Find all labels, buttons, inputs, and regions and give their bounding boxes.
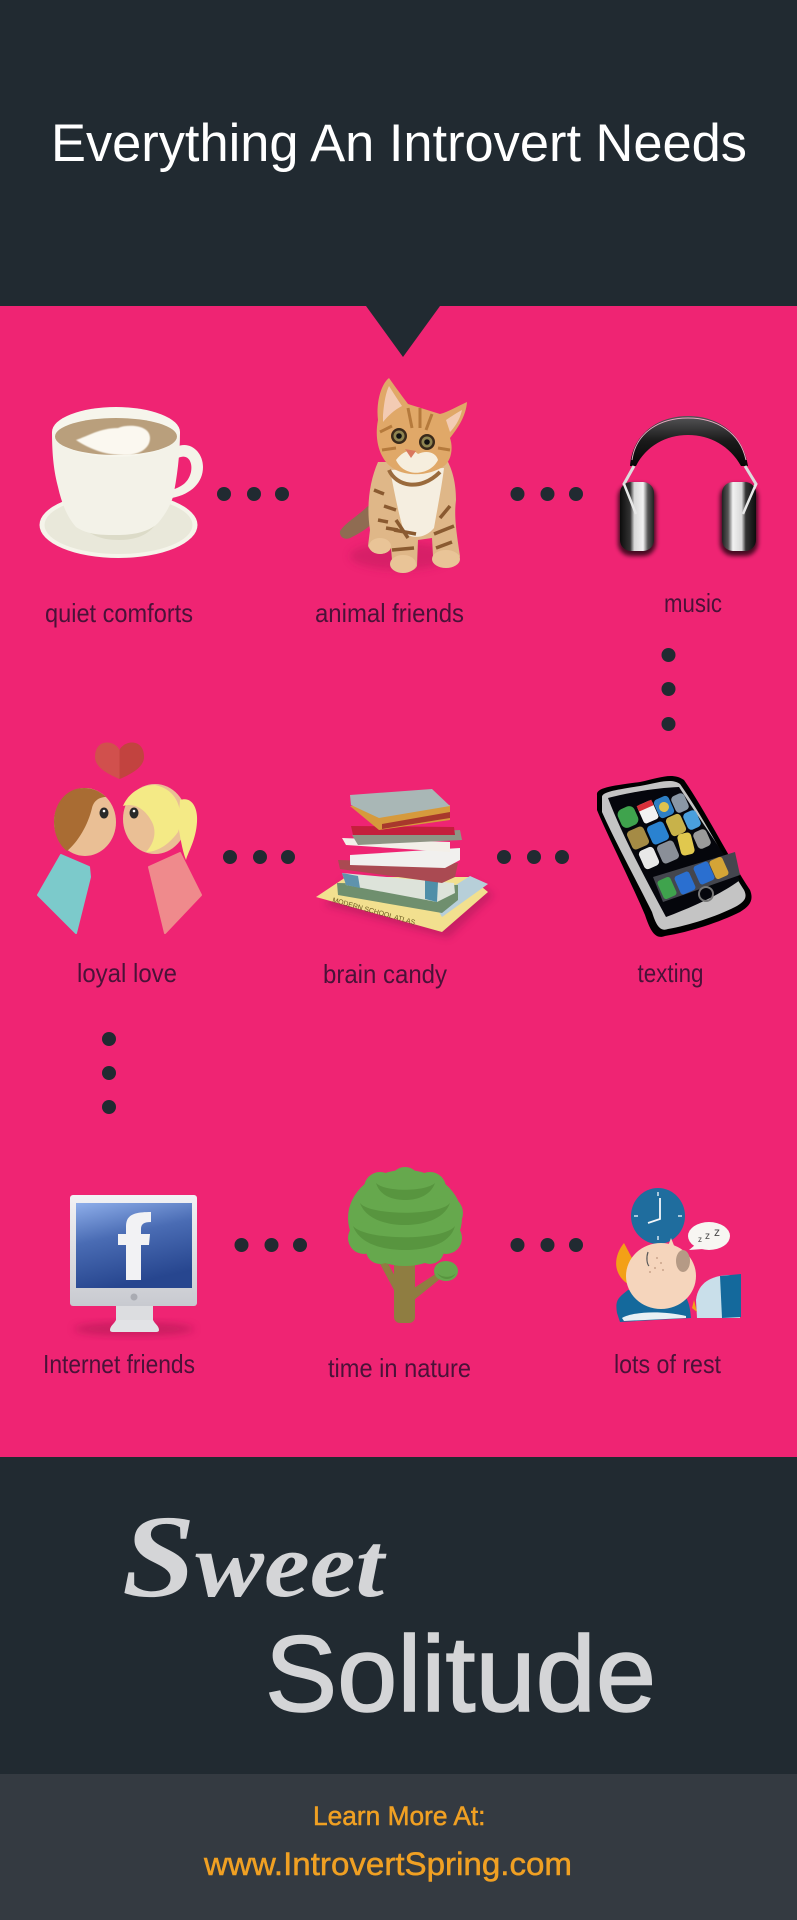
panel: header (0, 0, 797, 306)
label: quiet comforts: quiet comforts (45, 598, 193, 628)
label: loyal love: loyal love (77, 958, 177, 988)
icon: stack of books (316, 789, 494, 938)
panel: sweet solitude (0, 1457, 797, 1774)
pointer triangle (366, 306, 440, 357)
dots: left vertical (102, 1032, 116, 1114)
icon: tree (348, 1167, 463, 1323)
label: texting: texting (638, 958, 704, 988)
title: Everything An Introvert Needs (51, 114, 747, 173)
icon: sleeping person with clock: z (705, 1231, 710, 1242)
icon: sleeping person with clock (616, 1188, 741, 1322)
label: time in nature: time in nature (328, 1353, 471, 1383)
panel: footer (0, 1774, 797, 1920)
heading: Solitude: Solitude (265, 1613, 656, 1734)
icon: coffee cup (40, 407, 203, 558)
icon: monitor with facebook logo (70, 1195, 197, 1336)
label: Internet friends: Internet friends (43, 1349, 195, 1379)
icon: kitten (340, 378, 467, 573)
icon: sleeping person with clock: z (714, 1225, 720, 1239)
dots: row 2 right (497, 850, 569, 864)
dots: row 2 left (223, 850, 295, 864)
icon: smartphone (597, 776, 752, 937)
icon: stack of books: MODERN SCHOOL ATLAS (331, 897, 416, 927)
icon: headphones (618, 416, 758, 556)
label: music: music (664, 588, 722, 618)
label: lots of rest: lots of rest (614, 1349, 722, 1379)
dots: row 3 left (234, 1238, 307, 1252)
footer text: website: www.IntrovertSpring.com (203, 1846, 572, 1882)
heading: Sweet: Sweet (122, 1491, 387, 1622)
dots: row 3 right (510, 1238, 583, 1252)
panel: needs (0, 306, 797, 1457)
footer text: Learn More At: Learn More At: (313, 1801, 486, 1831)
dots: row 1 right (510, 487, 583, 501)
label: brain candy: brain candy (323, 959, 447, 989)
label: animal friends: animal friends (315, 598, 464, 628)
dots: right vertical (662, 648, 676, 731)
dots: row 1 left (217, 487, 289, 501)
icon: couple with heart (38, 743, 201, 933)
icon: sleeping person with clock: z (698, 1235, 702, 1244)
